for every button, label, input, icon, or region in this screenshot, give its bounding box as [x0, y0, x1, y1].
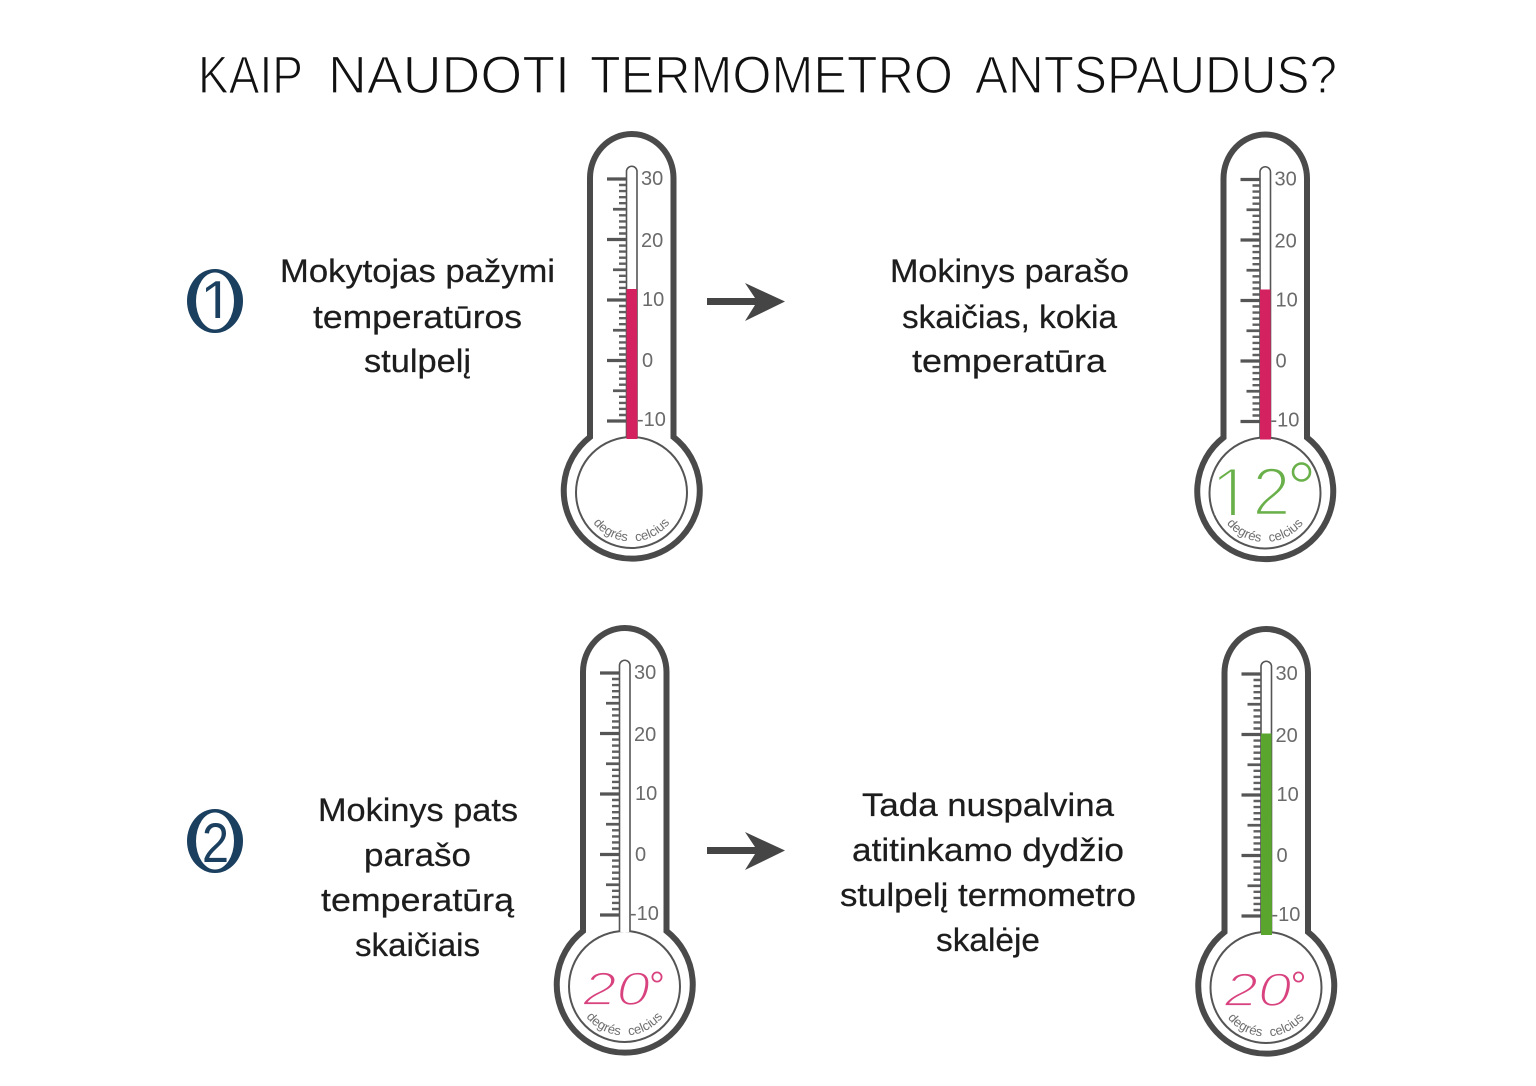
text: step 2 coloring: atitinkamo dydžio [852, 832, 1124, 868]
thermometer: step 2 colored green [1195, 626, 1338, 1057]
title: ANTSPAUDUS? [975, 46, 1337, 105]
icon: number 2 [187, 809, 243, 874]
text: step 2 student writes: parašo [364, 837, 471, 873]
red temperature column [1260, 290, 1271, 440]
curved label: degrés celcius [1228, 520, 1302, 542]
icon: number 2: 2 [202, 811, 229, 874]
handwritten value 12: 2 [1252, 454, 1290, 530]
degree sign [652, 972, 662, 982]
degree sign [1294, 972, 1303, 982]
scale numbers: 30 [641, 168, 663, 190]
text: step 2 coloring: stulpelį termometro [840, 877, 1136, 913]
scale numbers: 0 [1276, 845, 1288, 867]
text: step 1 teacher [280, 253, 555, 379]
scale numbers: 10 [642, 289, 664, 311]
curved label: degrés celcius [594, 520, 669, 541]
scale numbers: 30 [1274, 168, 1297, 190]
handwritten value 20: 20 [1223, 964, 1291, 1016]
title: TERMOMETRO [590, 46, 953, 105]
text: step 1 student: Mokinys parašo [890, 253, 1129, 289]
scale numbers: -10 [1270, 410, 1299, 432]
curved label: degrés celcius [1228, 1014, 1304, 1036]
green temperature column [1261, 734, 1272, 935]
scale numbers [1272, 663, 1300, 926]
text: step 2 student writes: skaičiais [355, 927, 480, 963]
title [198, 46, 1337, 105]
handwritten value 12: 1 [1210, 452, 1253, 538]
text: step 2 student writes: temperatūrą [321, 882, 514, 918]
arrow: step 2 [707, 832, 785, 870]
icon: number 1 [187, 268, 243, 336]
scale numbers: 20 [634, 724, 656, 746]
thermometer: step 1 answered 12 [1194, 132, 1336, 562]
text: step 1 teacher: stulpelį [364, 343, 471, 379]
scale numbers: 10 [1276, 290, 1298, 312]
red temperature column [626, 289, 638, 439]
scale numbers: 30 [634, 662, 656, 684]
curved label: degrés celcius [587, 1014, 662, 1035]
scale numbers: 10 [635, 783, 657, 805]
arrow: step 1 [707, 283, 785, 321]
scale numbers: 10 [1276, 784, 1299, 806]
text: step 2 coloring: skalėje [936, 922, 1040, 958]
handwritten value 20: 20 [582, 963, 650, 1015]
thermometer: step 2 value 20 [554, 625, 696, 1056]
scale numbers: 20 [1276, 725, 1298, 747]
scale numbers [630, 662, 659, 925]
scale numbers [1270, 168, 1299, 432]
scale numbers: -10 [637, 409, 666, 431]
scale numbers: 0 [635, 844, 646, 866]
scale numbers [637, 168, 666, 431]
icon: number 1: 1 [200, 268, 233, 336]
scale numbers: 20 [1274, 230, 1297, 252]
scale numbers: -10 [1272, 904, 1300, 926]
scale numbers: 0 [1276, 350, 1287, 372]
text: step 2 student writes [318, 792, 518, 963]
text: step 2 student writes: Mokinys pats [318, 792, 518, 828]
scale numbers: 20 [641, 230, 663, 252]
text: step 1 teacher: Mokytojas pažymi [280, 253, 555, 289]
scale numbers: 0 [642, 350, 653, 372]
text: step 1 student [890, 253, 1129, 379]
title: KAIP [198, 46, 303, 105]
text: step 1 student: skaičias, kokia [902, 299, 1117, 335]
thermometer: step 1 empty [560, 131, 703, 562]
text: step 2 coloring [840, 787, 1136, 958]
handwritten value 12 [1214, 468, 1286, 515]
text: step 2 coloring: Tada nuspalvina [862, 787, 1114, 823]
degree sign [1293, 464, 1310, 480]
title: NAUDOTI [328, 46, 570, 105]
scale numbers: -10 [630, 903, 659, 925]
scale numbers: 30 [1276, 663, 1298, 685]
text: step 1 teacher: temperatūros [313, 299, 522, 335]
text: step 1 student: temperatūra [912, 343, 1106, 379]
